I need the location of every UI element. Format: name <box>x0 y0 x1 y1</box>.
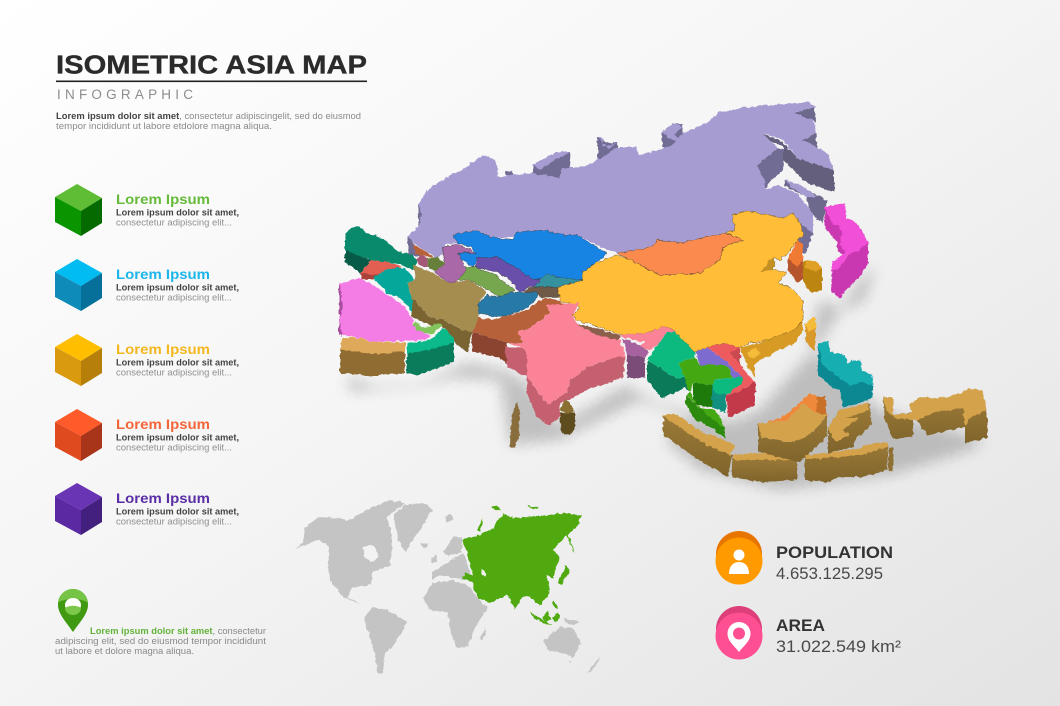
stat: area: 31.022.549 km² <box>776 637 901 656</box>
Philippines <box>818 342 873 407</box>
intro text: Lorem ipsum dolor sit amet, consectetur adipiscingelit, sed do eiusmod <box>56 111 361 122</box>
legend item: green: Lorem Ipsum <box>116 192 210 207</box>
region: Central Asia <box>434 230 607 317</box>
China side <box>740 300 803 378</box>
legend item: blue: Lorem ipsum dolor sit amet, <box>116 282 239 294</box>
Japan <box>825 203 868 298</box>
legend item: blue: consectetur adipiscing elit... <box>116 292 232 304</box>
legend item: yellow <box>55 334 239 386</box>
Cambodia <box>712 375 742 413</box>
stat: population: 4.653.125.295 <box>776 564 883 583</box>
Asia highlight <box>462 505 582 625</box>
Yemen <box>340 337 405 376</box>
Turkey <box>345 226 417 273</box>
Syria <box>360 260 402 280</box>
legend item: yellow: Lorem Ipsum <box>116 342 210 357</box>
Sakhalin <box>785 180 827 223</box>
Hainan <box>747 348 760 358</box>
Mongolia <box>617 233 743 275</box>
Caspian Sea gap <box>481 568 486 577</box>
icon: person <box>716 531 762 584</box>
icon: location pin <box>716 606 762 660</box>
Sulawesi <box>828 403 872 453</box>
Pakistan <box>472 298 565 343</box>
Azerbaijan <box>427 257 445 272</box>
legend item: green: Lorem ipsum dolor sit amet, <box>116 208 239 218</box>
Nepal <box>578 325 620 340</box>
region: Russia <box>408 102 834 258</box>
legend item: green: consectetur adipiscing elit... <box>116 218 232 228</box>
Kazakhstan <box>453 230 607 282</box>
stat: population: POPULATION <box>776 543 893 562</box>
Russia sides <box>408 123 813 256</box>
Bohai sea block <box>760 258 775 272</box>
grey continents <box>295 500 600 673</box>
Uzbekistan <box>475 257 545 293</box>
Java <box>732 453 797 482</box>
Tajikistan <box>523 287 560 297</box>
legend item: purple: Lorem ipsum dolor sit amet, <box>116 506 239 518</box>
legend item: green <box>55 184 239 236</box>
icon: green pin <box>58 589 88 632</box>
Bangladesh <box>622 338 650 378</box>
stat: population <box>716 531 893 584</box>
China <box>550 211 803 352</box>
Borneo <box>758 403 827 462</box>
title underline <box>56 80 367 82</box>
legend item: yellow: consectetur adipiscing elit... <box>116 368 232 378</box>
Gulf states <box>413 322 442 335</box>
Myanmar <box>647 332 695 398</box>
legend item: purple <box>55 483 239 535</box>
Hudson Bay gap <box>363 545 378 562</box>
Kyrgyzstan <box>533 273 583 287</box>
region: South Asia <box>472 298 675 448</box>
region: China side and Pacific islands <box>740 203 873 407</box>
legend item: red: Lorem Ipsum <box>116 417 210 432</box>
region: Indonesia <box>663 389 987 482</box>
Georgia <box>413 244 433 257</box>
legend item: purple: consectetur adipiscing elit... <box>116 516 232 528</box>
icon: yellow cube <box>55 334 102 386</box>
Sumatra <box>663 414 735 477</box>
icon: purple cube <box>55 483 102 535</box>
legend item: purple: Lorem Ipsum <box>116 491 210 506</box>
Taiwan <box>805 317 816 352</box>
Russia top <box>408 102 834 258</box>
region: China and Mongolia tops <box>550 211 803 352</box>
Vietnam <box>707 343 755 418</box>
Turkmenistan <box>456 267 515 297</box>
intro text: tempor incididunt ut labore etdolore magna aliqua. <box>56 121 272 132</box>
icon: blue cube <box>55 259 102 311</box>
intro text <box>56 111 361 132</box>
subtitle: INFOGRAPHIC <box>57 87 193 102</box>
location note <box>55 589 266 657</box>
Pakistan side <box>472 332 507 364</box>
location note: Lorem ipsum dolor sit amet, consectetur <box>90 626 266 637</box>
Kamchatka side <box>762 133 834 192</box>
icon: green cube <box>55 184 102 236</box>
map shadows <box>348 265 985 490</box>
Korea and Kyushu block <box>788 240 822 293</box>
legend item: red: consectetur adipiscing elit... <box>116 442 232 454</box>
Oman <box>407 328 454 375</box>
Caspian shore region <box>434 244 477 282</box>
Northeast India <box>620 326 675 350</box>
Lesser Sunda islands <box>805 442 893 482</box>
Iran side <box>412 298 472 353</box>
legend item: red <box>55 409 239 461</box>
Thailand <box>679 357 733 438</box>
isometric Asia map <box>339 102 987 490</box>
Sabah <box>766 393 826 423</box>
India side <box>505 347 625 425</box>
Laos <box>695 347 742 378</box>
stat: area <box>716 606 901 660</box>
legend item: blue: Lorem Ipsum <box>116 267 210 282</box>
location note: adipiscing elit, sed do eiusmod tempor incididunt <box>55 636 266 647</box>
location note: ut labore et dolore magna aliqua. <box>55 646 194 657</box>
region: Southeast Asia <box>647 332 755 438</box>
Afghanistan <box>478 292 538 317</box>
Armenia <box>415 255 428 267</box>
Papua <box>883 389 987 443</box>
region: Middle East <box>339 226 487 376</box>
legend item: yellow: Lorem ipsum dolor sit amet, <box>116 358 239 368</box>
Saudi Arabia <box>339 278 430 342</box>
legend item: red: Lorem ipsum dolor sit amet, <box>116 432 239 444</box>
legend item: blue <box>55 259 239 311</box>
Maldives <box>510 403 520 448</box>
Sri Lanka <box>560 399 575 435</box>
Iran <box>407 265 487 332</box>
Iraq <box>373 268 415 312</box>
world locator map <box>295 500 600 673</box>
stat: area: AREA <box>776 616 825 635</box>
India <box>507 303 625 405</box>
title: ISOMETRIC ASIA MAP <box>56 50 367 80</box>
icon: red cube <box>55 409 102 461</box>
